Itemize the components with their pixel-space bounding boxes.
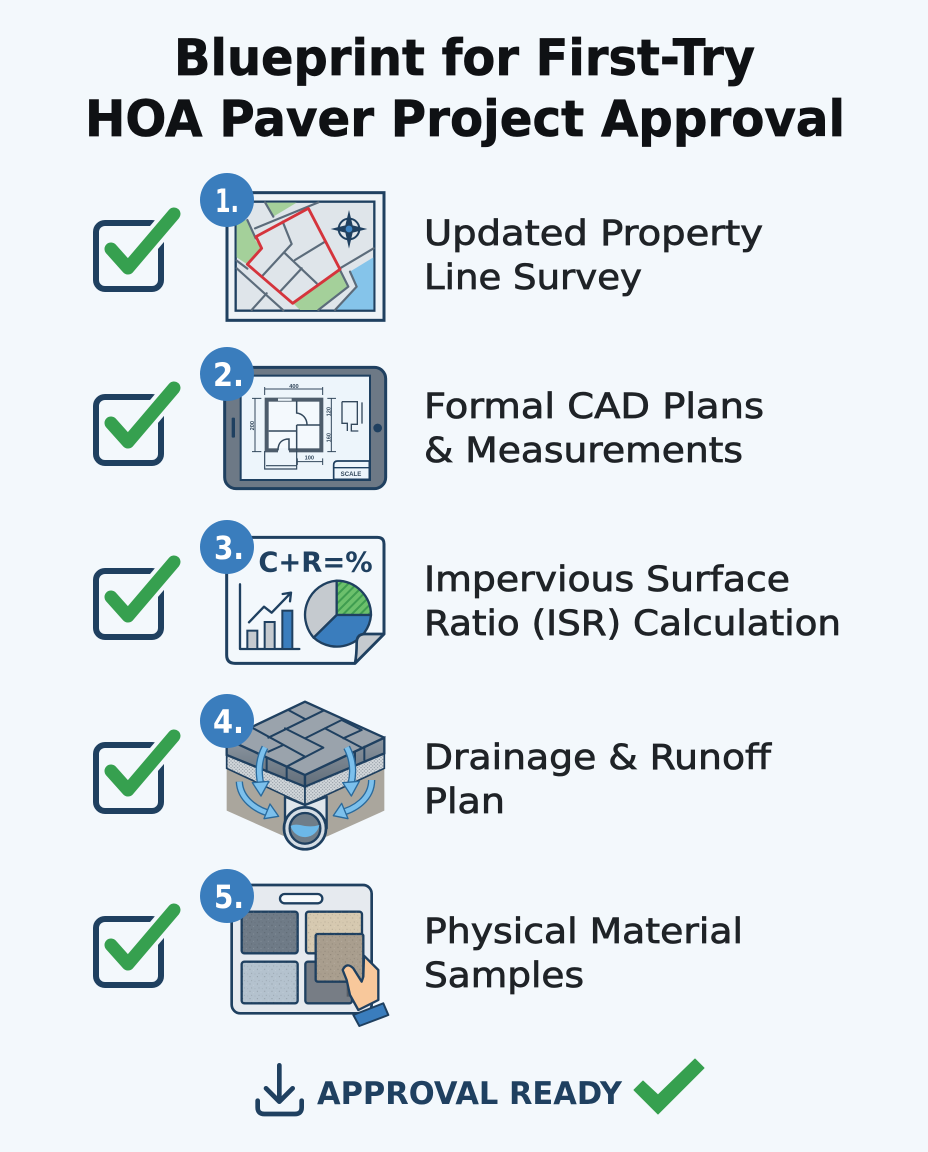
page fold	[355, 634, 384, 663]
checkbox 2	[96, 388, 174, 463]
checkbox 3	[96, 562, 174, 637]
scale box: SCALE	[341, 472, 361, 478]
label 3: Impervious Surface	[424, 560, 790, 600]
scale box	[334, 461, 369, 479]
badge 4: 4.	[213, 703, 244, 741]
badge 5	[200, 869, 254, 923]
hand	[343, 956, 378, 1010]
water flow arrows	[239, 747, 372, 819]
badge 2: 2.	[213, 356, 244, 394]
floor plan: 400	[289, 384, 299, 390]
label 4	[424, 738, 772, 822]
title: HOA Paver Project Approval	[85, 90, 845, 148]
label 5	[424, 912, 743, 996]
floor plan: 120	[326, 407, 332, 416]
icon 3: ISR calculation sheet: C+R=%	[258, 548, 373, 579]
badge 4	[200, 694, 254, 748]
label 2	[424, 387, 764, 471]
compass rose	[331, 210, 367, 249]
label 4: Plan	[424, 782, 505, 822]
badge 5: 5.	[214, 878, 244, 916]
held swatch	[316, 934, 363, 982]
checkbox 5	[96, 910, 174, 985]
label 1: Updated Property	[424, 214, 763, 254]
footer: approval ready	[258, 1059, 704, 1114]
label 3: Ratio (ISR) Calculation	[424, 604, 841, 644]
label 5: Samples	[424, 956, 584, 996]
checkbox 1	[96, 214, 174, 289]
floor plan: 160	[326, 433, 332, 442]
badge 1	[200, 173, 254, 227]
paver joints	[253, 710, 364, 780]
pie chart	[305, 581, 371, 647]
icon 2: tablet with CAD plan	[225, 367, 386, 489]
footer: approval ready: APPROVAL READY	[317, 1076, 623, 1112]
label 2: Formal CAD Plans	[424, 387, 764, 427]
icon 5: material sample board	[232, 885, 388, 1026]
label 1	[424, 214, 763, 298]
title: Blueprint for First-Try	[174, 29, 755, 87]
icon 1: property survey map	[227, 193, 384, 320]
title	[85, 29, 845, 148]
badge 3: 3.	[214, 529, 244, 567]
cuff	[353, 1003, 388, 1026]
checkbox 4	[96, 736, 174, 811]
label 4: Drainage & Runoff	[424, 738, 772, 778]
icon: green check	[634, 1059, 704, 1114]
label 2: & Measurements	[424, 431, 743, 471]
swatches	[242, 912, 362, 1003]
floor plan	[250, 384, 362, 469]
badge 3	[200, 520, 254, 574]
label 1: Line Survey	[424, 258, 642, 298]
drain pipe	[284, 797, 327, 849]
badge 2	[200, 347, 254, 401]
icon 3: ISR calculation sheet	[227, 537, 384, 663]
bar and trend chart	[240, 584, 299, 649]
floor plan: 200	[250, 421, 256, 430]
label 5: Physical Material	[424, 912, 743, 952]
label 3	[424, 560, 841, 644]
icon: download arrow	[258, 1065, 302, 1114]
badge 1: 1.	[215, 182, 239, 220]
floor plan: 100	[305, 456, 314, 462]
icon 4: paver drainage cross-section	[227, 702, 384, 849]
